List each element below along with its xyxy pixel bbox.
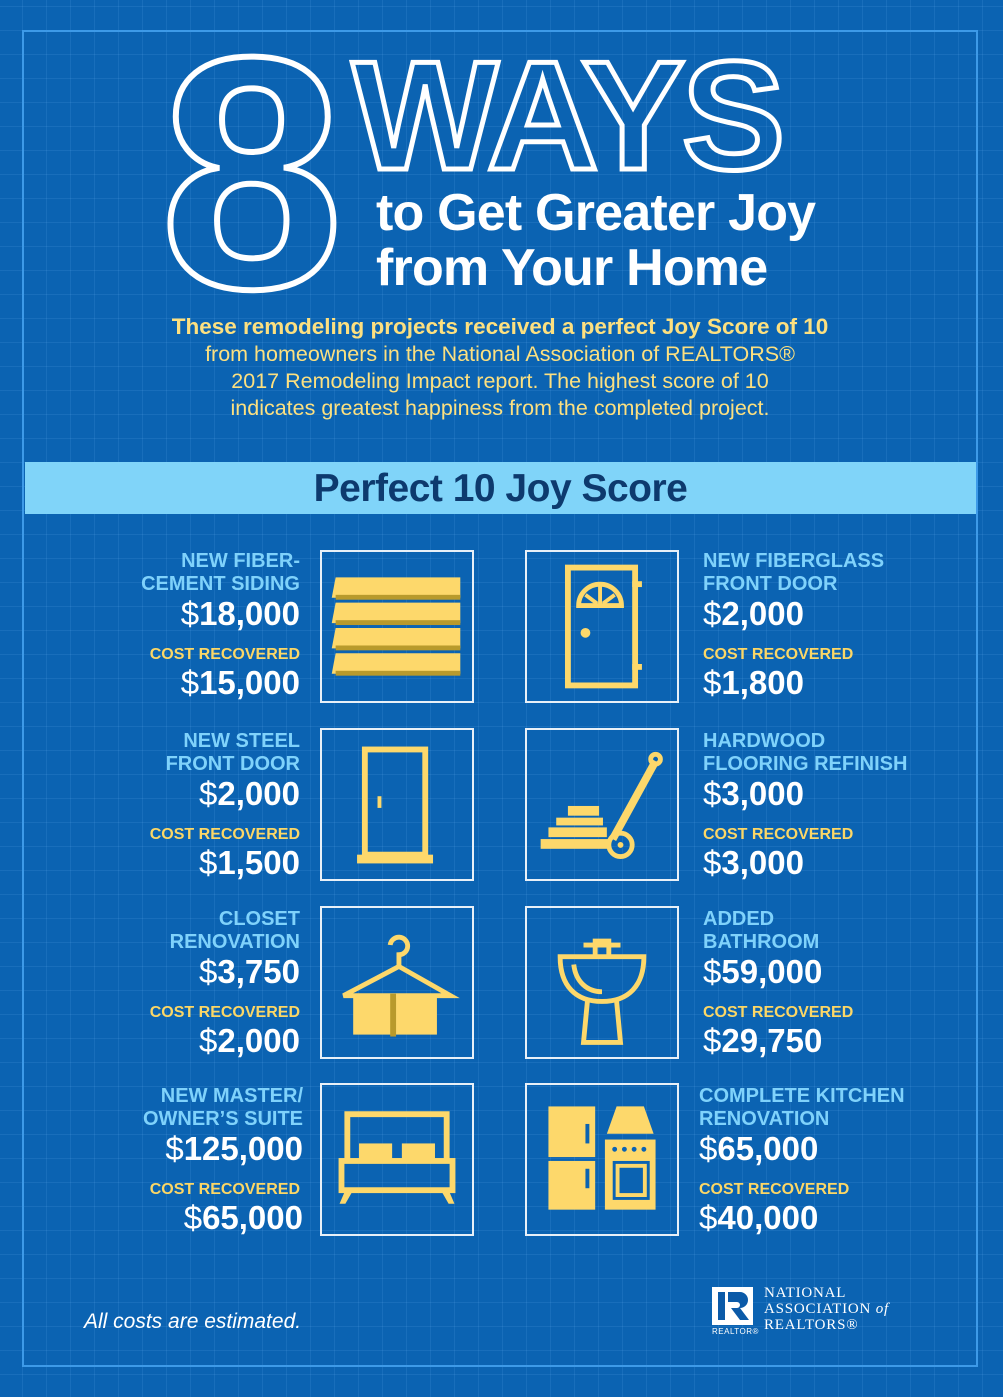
item: hardwood [703, 730, 907, 881]
item: hardwood: FLOORING REFINISH [703, 753, 907, 775]
subtitle: from Your Home [376, 239, 767, 297]
item: steel door: NEW STEEL [183, 730, 300, 752]
item: bathroom: ADDED [703, 908, 774, 930]
item: closet: COST RECOVERED [150, 1004, 300, 1021]
item: fiberglass door: $1,800 [703, 664, 804, 701]
item: steel door: COST RECOVERED [150, 826, 300, 843]
item: master suite: $65,000 [184, 1199, 303, 1236]
item: fiberglass door: NEW FIBERGLASS [703, 550, 884, 572]
icon: kitchen [525, 1083, 679, 1236]
item: steel door: $2,000 [199, 775, 300, 812]
item: siding: NEW FIBER- [181, 550, 300, 572]
item: hardwood: $3,000 [703, 775, 804, 812]
item: kitchen [699, 1085, 905, 1236]
item: hardwood: HARDWOOD [703, 730, 825, 752]
item: bathroom: $29,750 [703, 1022, 822, 1059]
item: closet: RENOVATION [170, 931, 300, 953]
item: master suite: OWNER’S SUITE [143, 1108, 303, 1130]
item: bathroom: $59,000 [703, 953, 822, 990]
banner [25, 462, 976, 514]
item: bathroom: BATHROOM [703, 931, 819, 953]
logo: NAR: ASSOCIATION of [764, 1301, 889, 1317]
logo: NAR: NATIONAL [764, 1285, 846, 1301]
item: hardwood: COST RECOVERED [703, 826, 853, 843]
item: master suite: $125,000 [165, 1130, 303, 1167]
item: fiberglass door: COST RECOVERED [703, 646, 853, 663]
item: siding: $18,000 [181, 595, 300, 632]
intro text [172, 314, 828, 420]
icon: fiberglass door [525, 550, 679, 703]
item: closet: $2,000 [199, 1022, 300, 1059]
intro text: 2017 Remodeling Impact report. The highest score of 10 [231, 369, 769, 393]
item: bathroom: COST RECOVERED [703, 1004, 853, 1021]
banner: Perfect 10 Joy Score [314, 467, 687, 510]
subtitle [376, 184, 816, 297]
icon: bed [320, 1083, 474, 1236]
item: kitchen: COMPLETE KITCHEN [699, 1085, 905, 1107]
intro text: from homeowners in the National Association of REALTORS® [205, 342, 795, 366]
item: siding: $15,000 [181, 664, 300, 701]
intro text: These remodeling projects received a perfect Joy Score of 10 [172, 314, 828, 339]
item: siding: CEMENT SIDING [141, 573, 300, 595]
item: fiberglass door: FRONT DOOR [703, 573, 837, 595]
logo: NAR [712, 1285, 890, 1336]
footnote: All costs are estimated. [84, 1310, 301, 1333]
icon: steel door [320, 728, 474, 881]
item: hardwood: $3,000 [703, 844, 804, 881]
item: kitchen: $40,000 [699, 1199, 818, 1236]
item: master suite: COST RECOVERED [150, 1181, 300, 1198]
item: kitchen: COST RECOVERED [699, 1181, 849, 1198]
logo: NAR: REALTOR® [712, 1327, 759, 1336]
intro text: indicates greatest happiness from the completed project. [230, 396, 770, 420]
item: closet [150, 908, 300, 1059]
icon: sink [525, 906, 679, 1059]
item: closet: $3,750 [199, 953, 300, 990]
item: kitchen: $65,000 [699, 1130, 818, 1167]
icon: floor sander [525, 728, 679, 881]
logo: NAR: REALTORS® [764, 1317, 858, 1333]
item: fiberglass door: $2,000 [703, 595, 804, 632]
item: closet: CLOSET [219, 908, 300, 930]
item: siding [141, 550, 300, 701]
icon: siding [320, 550, 474, 703]
item: steel door [150, 730, 300, 881]
item: siding: COST RECOVERED [150, 646, 300, 663]
item: steel door: $1,500 [199, 844, 300, 881]
subtitle: to Get Greater Joy [376, 184, 815, 242]
item: kitchen: RENOVATION [699, 1108, 829, 1130]
item: master suite [143, 1085, 303, 1236]
item: steel door: FRONT DOOR [166, 753, 300, 775]
icon: hanger [320, 906, 474, 1059]
item: fiberglass door [703, 550, 884, 701]
item: master suite: NEW MASTER/ [161, 1085, 303, 1107]
item: bathroom [703, 908, 853, 1059]
